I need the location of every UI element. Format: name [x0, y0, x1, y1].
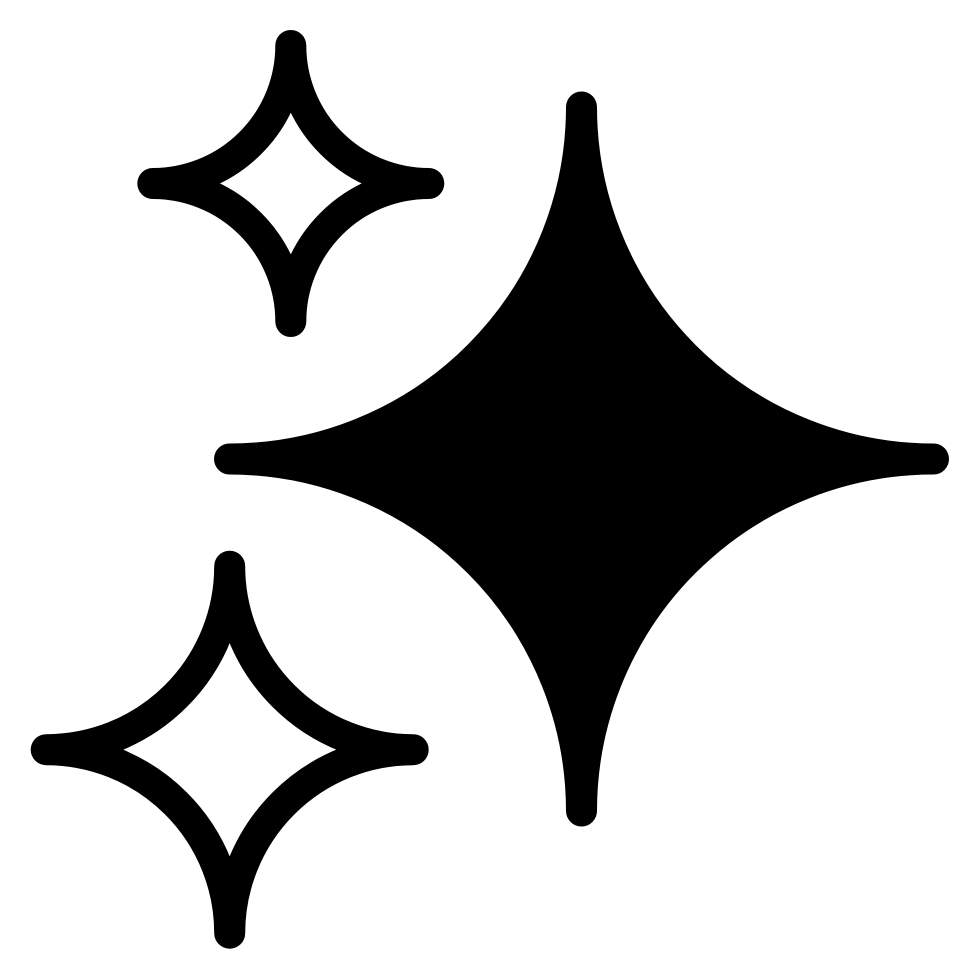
- icon: bottom small outlined star: [46, 566, 413, 933]
- icon: large filled star: [230, 107, 934, 811]
- icon: top small outlined star: [153, 46, 429, 322]
